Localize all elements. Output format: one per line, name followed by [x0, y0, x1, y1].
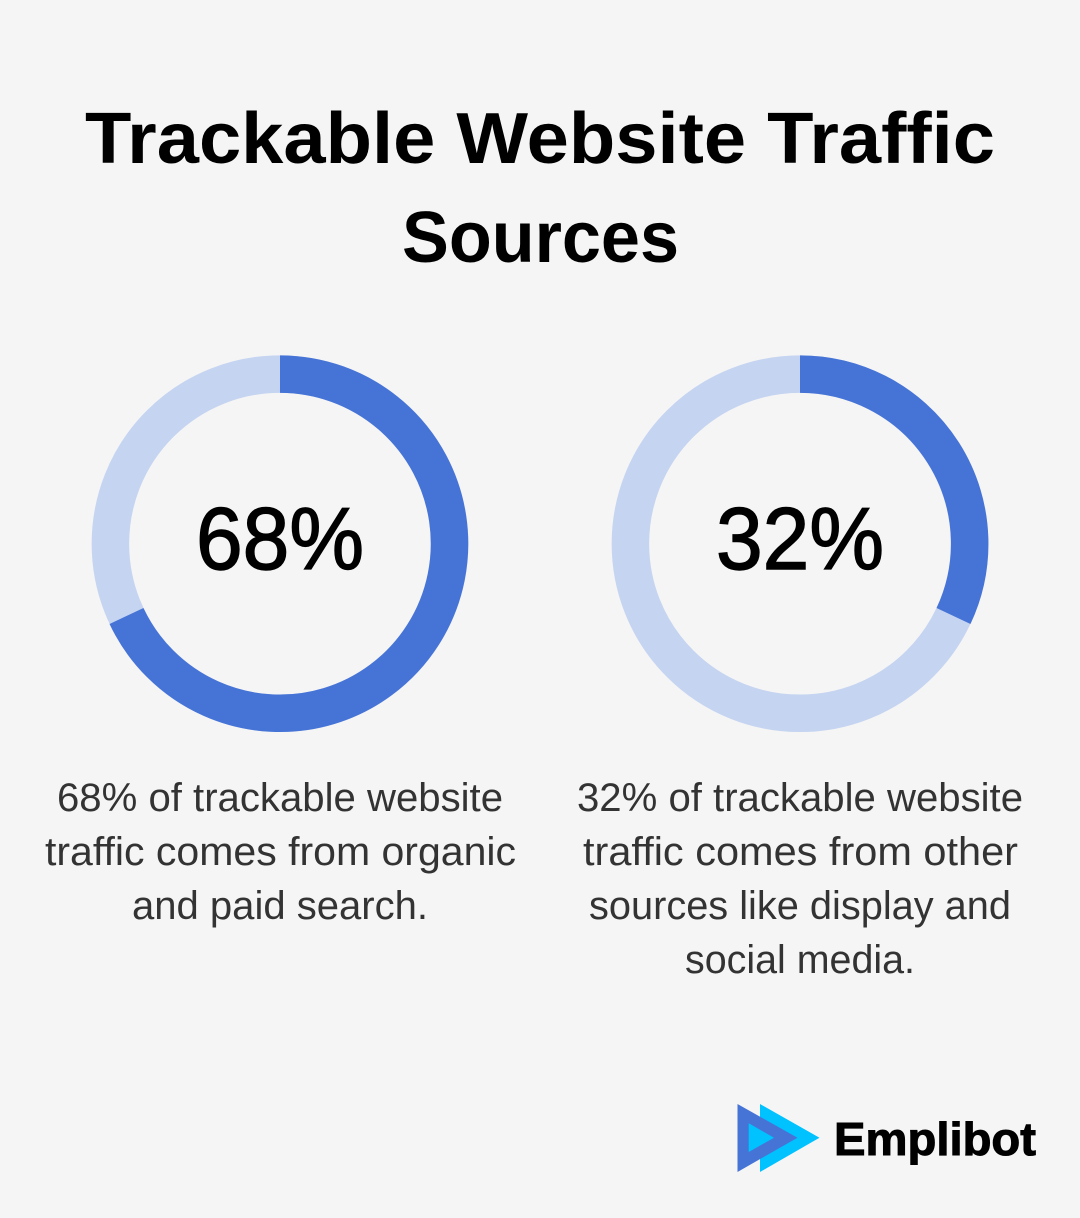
description: organic and paid search — [45, 776, 516, 928]
description: other sources: social media. — [685, 938, 915, 982]
description: organic and paid search: and paid search. — [132, 884, 428, 928]
description: organic and paid search: traffic comes from organic — [45, 830, 516, 874]
value: 32%: 32% — [716, 489, 884, 588]
value: 68%: 68% — [196, 489, 364, 588]
title — [85, 99, 995, 278]
description: other sources: traffic comes from other — [583, 830, 1018, 874]
title: Sources — [402, 198, 679, 278]
donut chart: 32% — [630, 374, 970, 713]
panel: 68 percent — [45, 374, 516, 928]
title: Trackable Website Traffic — [85, 99, 995, 179]
wordmark: Emplibot — [834, 1113, 1036, 1165]
donut chart: 68% — [110, 374, 450, 713]
description: other sources: 32% of trackable website — [577, 776, 1023, 820]
description: organic and paid search: 68% of trackable website — [57, 776, 503, 820]
logo: Emplibot — [738, 1104, 1036, 1172]
icon: play triangles — [738, 1104, 820, 1172]
description: other sources — [577, 776, 1023, 982]
panel: 32 percent — [577, 374, 1023, 982]
description: other sources: sources like display and — [589, 884, 1011, 928]
